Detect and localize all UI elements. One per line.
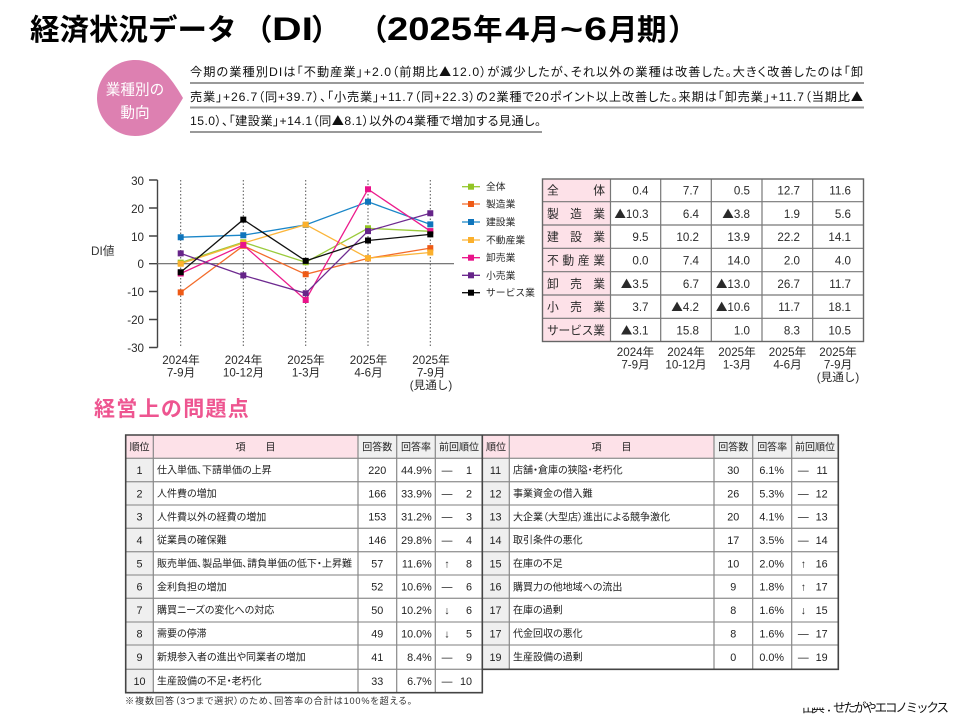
table: business problems ranking <box>126 435 838 693</box>
row 12: 事業資金の借入難 <box>513 487 593 500</box>
y axis title: DI値 <box>91 244 115 258</box>
row 3: 31.2% <box>401 512 432 524</box>
row 17: 17 <box>489 605 502 617</box>
row 12 <box>489 487 828 500</box>
table period labels: 10-12月 <box>665 358 707 372</box>
x axis labels: 2024年 <box>162 353 200 367</box>
row 10: 生産設備の不足・老朽化 <box>157 675 262 688</box>
data table: DI values: 2.0 <box>784 254 800 268</box>
row 11: 11 <box>816 465 828 477</box>
data table: DI values: ▲4.2 <box>671 299 699 315</box>
row 17: 1.6% <box>759 605 784 617</box>
row 14: 17 <box>727 535 739 547</box>
row 13 <box>489 510 828 524</box>
row 4: 146 <box>368 535 386 547</box>
row 12: 26 <box>727 488 739 500</box>
row 19: 0.0% <box>759 652 784 664</box>
row 6: 6 <box>136 582 143 594</box>
row 1: 44.9% <box>401 465 432 477</box>
data table: DI values: ▲10.3 <box>614 206 648 222</box>
icon: pink speech bubble: 動向 <box>120 104 150 122</box>
row 6: 6 <box>466 582 472 594</box>
data table: DI values: 10.5 <box>828 324 851 338</box>
data table: DI values: 11.6 <box>829 184 851 198</box>
row 12: 12 <box>489 488 502 500</box>
table period labels: 7-9月 <box>621 358 650 372</box>
series: サービス業 <box>178 217 433 275</box>
row 4: 4 <box>466 535 472 547</box>
row 16: 9 <box>730 582 736 594</box>
row 2: 33.9% <box>401 488 432 500</box>
data table: DI values: 10.2 <box>676 231 699 244</box>
table header: 回答率 <box>757 440 787 454</box>
data table: DI values: 製造業 <box>547 207 605 221</box>
row 16: 17 <box>816 582 828 594</box>
legend: 全体 <box>486 180 506 193</box>
row 1: 1 <box>136 465 143 477</box>
row 18: 17 <box>489 628 502 640</box>
row 8: 10.0% <box>401 628 432 640</box>
row 6 <box>136 580 472 594</box>
title: 期 <box>637 14 667 47</box>
row 13: — <box>798 512 809 524</box>
y axis: 10 <box>131 231 144 244</box>
row 13: 4.1% <box>759 512 784 524</box>
row 7: 7 <box>136 605 143 617</box>
data table: DI values: 18.1 <box>828 301 851 314</box>
row 9: — <box>442 652 453 664</box>
row 17: 15 <box>816 605 828 617</box>
series: 全体 <box>178 225 433 266</box>
row 14: 3.5% <box>759 535 784 547</box>
legend: 卸売業 <box>486 251 516 264</box>
x axis labels: 2025年 <box>412 353 450 367</box>
title: 2025 <box>387 11 472 47</box>
y axis: 30 <box>131 175 144 188</box>
data table: DI values: 0.0 <box>632 254 648 268</box>
data table: DI values: 卸売業 <box>547 277 605 291</box>
data table: DI values: 26.7 <box>777 278 800 291</box>
row 9 <box>136 651 472 664</box>
row 16: 16 <box>489 582 502 594</box>
row 15: 16 <box>816 558 828 570</box>
row 19: 19 <box>489 652 502 664</box>
row 12: — <box>798 488 809 500</box>
row 14: 14 <box>489 535 502 547</box>
title: 月 <box>530 14 560 47</box>
row 17 <box>489 604 828 617</box>
x axis labels <box>162 353 452 392</box>
row 8: 49 <box>371 628 383 640</box>
title: ） <box>668 14 698 47</box>
row 6: 52 <box>371 582 383 594</box>
row 2: 2 <box>136 488 143 500</box>
row 8: 5 <box>466 628 472 640</box>
data table: DI values: 小売業 <box>547 300 605 314</box>
series: 卸売業 <box>178 186 433 303</box>
title: （ <box>358 14 388 47</box>
row 18: 代金回収の悪化 <box>513 627 583 640</box>
row 5 <box>136 557 472 570</box>
legend: サービス業 <box>486 286 535 299</box>
table header: 前回順位 <box>439 440 479 454</box>
table period labels: 2025年 <box>718 345 756 359</box>
x axis labels: 2025年 <box>350 353 388 367</box>
row 4 <box>136 534 472 547</box>
row 5: 5 <box>136 558 143 570</box>
row 1: 仕入単価、下請単価の上昇 <box>157 464 272 476</box>
row 3 <box>136 510 472 524</box>
row 5: 8 <box>466 558 472 570</box>
row 18: 1.6% <box>759 628 784 640</box>
row 15: 15 <box>489 558 502 570</box>
row 2: 人件費の増加 <box>157 487 217 500</box>
table header: 項 目 <box>236 442 276 454</box>
legend: 建設業 <box>486 216 516 228</box>
row 2 <box>136 487 472 500</box>
table header: 順位 <box>486 440 506 454</box>
data table: DI values: ▲3.1 <box>621 322 648 338</box>
data table: DI values: ▲3.8 <box>722 206 750 222</box>
row 14: — <box>798 535 809 547</box>
series: 建設業 <box>178 199 433 240</box>
row 1 <box>136 464 472 477</box>
data table: DI values: 11.7 <box>829 278 851 291</box>
table header: 前回順位 <box>795 440 835 454</box>
table period labels: 4-6月 <box>773 358 802 372</box>
table header <box>130 440 835 454</box>
data table: DI values: ▲10.6 <box>716 299 750 315</box>
row 2: 2 <box>466 488 472 500</box>
row 7: ↓ <box>444 605 450 617</box>
row 9: 41 <box>371 652 383 664</box>
table header: 項 目 <box>592 442 632 454</box>
row 3: — <box>442 512 453 524</box>
row 8 <box>136 627 472 640</box>
title: 経済状況データ <box>30 13 237 47</box>
data table: DI values: 7.7 <box>683 184 699 198</box>
table period labels: (見通し) <box>817 371 859 384</box>
table header: 回答数 <box>718 440 748 454</box>
title: 4 <box>505 11 529 47</box>
row 9: 8.4% <box>407 652 432 664</box>
row 7: 購買ニーズの変化への対応 <box>157 604 274 617</box>
y axis: 20 <box>131 203 144 216</box>
row 14: 取引条件の悪化 <box>513 534 583 547</box>
y axis: 0 <box>138 258 144 271</box>
table period labels: 2024年 <box>667 345 705 359</box>
data table: DI values: 3.7 <box>632 301 648 314</box>
row 5: ↑ <box>444 558 450 570</box>
table header: 回答数 <box>362 440 392 454</box>
x axis labels: 7-9月 <box>167 366 195 380</box>
row 11: 店舗・倉庫の狭隘・老朽化 <box>513 464 623 476</box>
data table: DI values: 22.2 <box>777 231 800 244</box>
data table: DI values: 7.4 <box>683 254 700 268</box>
data table: DI values: 0.4 <box>632 184 649 198</box>
series: 不動産業 <box>178 222 433 267</box>
data table: DI values: 8.3 <box>784 324 800 338</box>
table period labels: 2024年 <box>617 345 655 359</box>
title: 月 <box>608 14 638 47</box>
title: 6 <box>584 11 607 47</box>
row 5: 販売単価、製品単価、請負単価の低下・上昇難 <box>157 557 352 570</box>
row 3: 3 <box>136 512 143 524</box>
row 10: 10 <box>460 676 472 688</box>
text block: sector trend paragraph: 売業」+26.7（同+39.7）、「小売業」+11.7（同+22.3）の2業種で20ポイント以上改善した。来期は「卸売業」+11.7（当期比▲ <box>190 87 863 105</box>
table period labels: 1-3月 <box>723 358 751 372</box>
row 10: 10 <box>133 676 146 688</box>
text block: sector trend paragraph: 今期の業種別DIは「不動産業」+2.0（前期比▲12.0）が減少したが、それ以外の業種は改善した。大きく改善したのは「卸 <box>190 62 863 80</box>
y axis: -10 <box>127 286 144 299</box>
row 15: 2.0% <box>759 558 784 570</box>
row 4: — <box>442 535 453 547</box>
icon: pink speech bubble <box>97 60 183 136</box>
row 14: 14 <box>816 535 828 547</box>
row 11: 6.1% <box>759 465 784 477</box>
table period labels: 7-9月 <box>824 358 852 372</box>
series: 小売業 <box>178 210 433 296</box>
row 16: 購買力の他地域への流出 <box>513 580 622 593</box>
row 13: 13 <box>489 512 502 524</box>
title <box>30 11 698 47</box>
row 18 <box>489 627 828 640</box>
row 1: 1 <box>466 465 472 477</box>
data table: DI values: 14.0 <box>727 254 750 268</box>
row 15: 在庫の不足 <box>513 557 563 570</box>
text block: sector trend paragraph: 15.0）、「建設業」+14.1（同▲8.1）以外の4業種で増加する見通し。 <box>190 111 541 129</box>
table period labels: 2025年 <box>769 345 807 359</box>
row 3: 3 <box>466 512 472 524</box>
y axis <box>127 175 158 355</box>
data table: DI values: 13.9 <box>727 231 750 244</box>
data table: DI values: 建設業 <box>547 230 605 244</box>
source credit: 出典：せたがやエコノミックス <box>802 700 949 715</box>
row 4: 4 <box>136 535 143 547</box>
table period labels <box>617 345 859 384</box>
x axis labels: 10-12月 <box>223 366 264 380</box>
data table: DI values: サービス業 <box>547 324 605 338</box>
row 17: 8 <box>730 605 736 617</box>
row 12: 12 <box>816 488 828 500</box>
row 7: 10.2% <box>401 605 432 617</box>
row 19 <box>489 651 828 664</box>
row 1: 220 <box>368 465 386 477</box>
x axis labels: (見通し) <box>410 379 452 392</box>
data table: DI values <box>542 179 864 384</box>
series: 製造業 <box>178 243 433 295</box>
row 7 <box>136 604 472 617</box>
row 13: 大企業（大型店）進出による競争激化 <box>513 510 670 523</box>
row 9: 9 <box>136 652 143 664</box>
row 19: 0 <box>730 652 736 664</box>
footnote: ※複数回答（3つまで選択）のため、回答率の合計は100%を超える。 <box>125 695 412 706</box>
row 15: ↑ <box>801 558 806 570</box>
row 3: 人件費以外の経費の増加 <box>157 510 266 523</box>
title: ~ <box>560 11 583 47</box>
x axis labels: 1-3月 <box>292 366 320 380</box>
panel: sector trend summary <box>97 60 864 136</box>
row 16: ↑ <box>801 582 806 594</box>
row 4: 従業員の確保難 <box>157 534 227 547</box>
row 6: 10.6% <box>401 582 432 594</box>
row 6: — <box>442 582 453 594</box>
icon: pink speech bubble: 業種別の <box>106 82 164 98</box>
row 10: — <box>442 676 453 688</box>
row 2: 166 <box>368 488 386 500</box>
row 7: 50 <box>371 605 383 617</box>
x axis labels: 2025年 <box>287 353 325 367</box>
data table: DI values: 1.9 <box>784 208 800 221</box>
data table: DI values: 14.1 <box>828 231 851 244</box>
legend <box>462 180 535 299</box>
line chart: DI by sector <box>91 175 535 392</box>
table period labels: 2025年 <box>819 345 857 359</box>
row 14 <box>489 534 828 547</box>
row 8: 需要の停滞 <box>157 627 207 640</box>
row 13: 13 <box>816 512 828 524</box>
row 16 <box>489 580 828 594</box>
row 12: 5.3% <box>759 488 784 500</box>
row 17: ↓ <box>801 605 806 617</box>
data table: DI values: 0.5 <box>734 184 750 198</box>
row 10: 33 <box>371 676 383 688</box>
data table: DI values: 1.0 <box>734 324 750 338</box>
row 2: — <box>442 488 453 500</box>
row 9: 9 <box>466 652 472 664</box>
row 17: 在庫の過剰 <box>513 604 563 617</box>
row 7: 6 <box>466 605 472 617</box>
table header: 順位 <box>130 440 150 454</box>
data table: DI values: ▲13.0 <box>716 276 750 292</box>
row 15 <box>489 557 828 570</box>
data table: DI values: 5.6 <box>835 208 851 221</box>
data table: DI values: 6.4 <box>683 208 700 221</box>
title: 年 <box>473 14 503 47</box>
data table: DI values: 4.0 <box>835 254 851 268</box>
row 5: 11.6% <box>402 558 432 570</box>
title: （ <box>243 14 273 47</box>
y axis: -30 <box>127 342 144 355</box>
data table: DI values: 11.7 <box>778 301 800 314</box>
row 4: 29.8% <box>401 535 432 547</box>
data table: DI values: 15.8 <box>676 324 699 338</box>
title: ） <box>311 14 341 47</box>
heading: business problems: 経営上の問題点 <box>94 398 250 421</box>
header and rank fills <box>126 435 838 692</box>
data table: DI values: 9.5 <box>632 231 648 244</box>
text block: sector trend paragraph <box>190 62 864 132</box>
row 11: 30 <box>727 465 739 477</box>
row 11: — <box>798 465 809 477</box>
row 8: ↓ <box>444 628 450 640</box>
row 16: 1.8% <box>759 582 784 594</box>
x axis labels: 2024年 <box>225 353 263 367</box>
row 11 <box>490 464 828 477</box>
row 19: 生産設備の過剰 <box>513 651 583 664</box>
x axis labels: 4-6月 <box>354 366 383 380</box>
legend: 製造業 <box>486 198 516 210</box>
row 19: 19 <box>816 652 828 664</box>
row 5: 57 <box>371 558 383 570</box>
row 10: 6.7% <box>407 676 432 688</box>
row 6: 金利負担の増加 <box>157 580 227 593</box>
x axis labels: 7-9月 <box>417 366 445 380</box>
legend: 不動産業 <box>486 234 525 246</box>
row 9: 新規参入者の進出や同業者の増加 <box>157 651 306 664</box>
row 3: 153 <box>368 512 386 524</box>
data table: DI values: 不動産業 <box>547 254 605 268</box>
y axis: -20 <box>127 314 144 327</box>
legend: 小売業 <box>486 269 516 282</box>
row 18: — <box>798 628 809 640</box>
data table: DI values: 6.7 <box>683 278 699 291</box>
row 10 <box>133 675 472 688</box>
row 1: — <box>442 465 453 477</box>
row 15: 10 <box>727 558 739 570</box>
data table: DI values: ▲3.5 <box>621 276 648 292</box>
row 19: — <box>798 652 809 664</box>
table header: 回答率 <box>401 440 431 454</box>
title: DI <box>272 11 313 47</box>
row 18: 17 <box>816 628 828 640</box>
row 8: 8 <box>136 628 143 640</box>
data table: DI values: 12.7 <box>777 184 800 198</box>
row 18: 8 <box>730 628 736 640</box>
row 11: 11 <box>490 465 501 477</box>
data table: DI values: 全 体 <box>547 184 605 198</box>
row 13: 20 <box>727 512 739 524</box>
